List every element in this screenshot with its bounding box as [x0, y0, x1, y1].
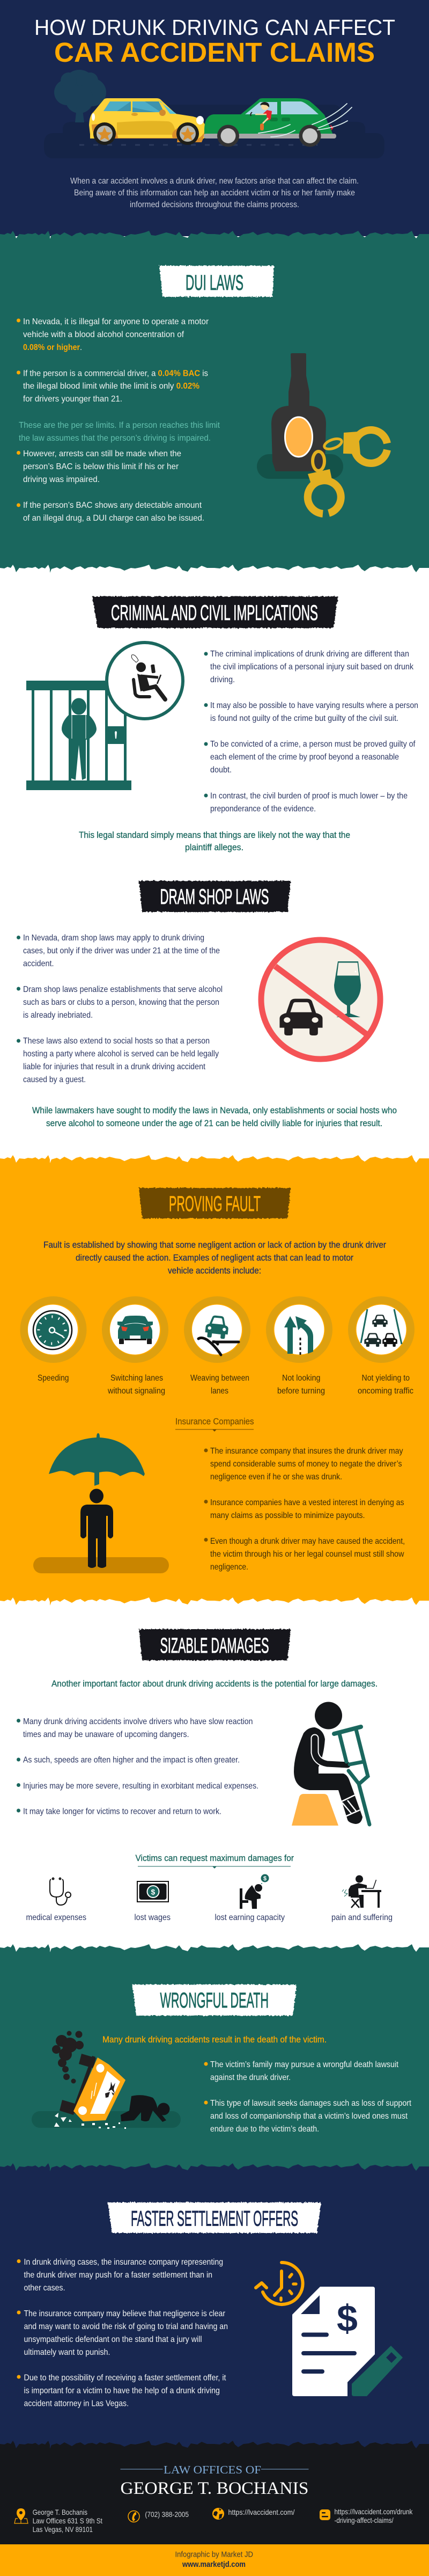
text: DUI bullets: These are the per se limits. If a person reaches this limit [19, 421, 220, 430]
illustration: car crash [44, 70, 384, 158]
panel: footer [0, 2441, 429, 2545]
labels: damages types: pain and suffering [331, 1913, 393, 1922]
heading: proving fault [139, 1188, 291, 1218]
text: settlement bullets: ultimately want to punish. [24, 2348, 110, 2357]
contact: address [14, 2508, 102, 2534]
contact: address: Las Vegas, NV 89101 [33, 2525, 93, 2534]
logo: law offices [120, 2463, 309, 2498]
text: legal standard statement [79, 830, 350, 852]
text: dram shop bullets: such as bars or clubs to a person, knowing that the person [23, 998, 219, 1007]
text: damages bullets: As such, speeds are often higher and the impact is often greater. [23, 1755, 240, 1765]
text: dram shop bullets: cases, but only if the driver was under 21 at the time of the [23, 946, 220, 955]
heading: dram shop laws [139, 881, 291, 912]
drunk driver [250, 102, 272, 130]
icon: jail cell with drunk driver [26, 643, 183, 790]
text: DUI bullets: person’s BAC is below this limit if his or her [23, 462, 179, 471]
text: DUI bullets: for drivers younger than 21. [23, 395, 122, 404]
text: damages bullets: Injuries may be more severe, resulting in exorbitant medical expenses. [23, 1782, 258, 1791]
text: DUI bullets [17, 317, 220, 523]
icon: lost earning capacity [240, 1874, 269, 1909]
contact: blog: https://lvaccident.com/drunk [335, 2507, 413, 2516]
text: wrongful death bullets: against the drunk driver. [210, 2073, 291, 2082]
yellow car [89, 98, 205, 145]
labels: damages types: lost earning capacity [214, 1913, 285, 1922]
text: dram shop bullets: hosting a party where alcohol is served can be held legally [23, 1049, 219, 1059]
labels: negligent acts: Weaving between [190, 1374, 249, 1383]
text: DUI bullets: driving was impaired. [23, 475, 100, 484]
heading: insurance companies [175, 1417, 254, 1432]
text: insurance bullets: The insurance company that insures the drunk driver may [210, 1447, 403, 1456]
labels: negligent acts: Not looking [282, 1374, 321, 1383]
logo: law offices: LAW OFFICES OF [164, 2463, 261, 2476]
text: settlement bullets: In drunk driving cases, the insurance company representing [24, 2258, 223, 2267]
icon: not looking before turning [270, 1300, 329, 1359]
intro text [70, 177, 359, 209]
text: settlement bullets: unsympathetic defendant on the stand that a jury will [24, 2335, 202, 2344]
panel: header [0, 0, 429, 236]
text: legal standard statement: This legal standard simply means that things are likely not the way that the [79, 830, 350, 840]
labels: negligent acts: lanes [211, 1386, 228, 1396]
text: insurance bullets: the victim through his or her legal counsel must still show [210, 1550, 404, 1559]
icon: stethoscope [50, 1878, 71, 1905]
contact: phone [128, 2510, 189, 2522]
text: damages bullets: Many drunk driving accidents involve drivers who have slow reaction [23, 1717, 253, 1726]
icon: no drinking and driving sign [261, 940, 380, 1059]
credit bar: Infographic by Market JD [175, 2550, 253, 2559]
text: insurance bullets: negligence. [210, 1563, 248, 1572]
text: settlement bullets: The insurance company may believe that negligence is clear [24, 2309, 226, 2318]
standing person [80, 1489, 113, 1568]
text: criminal and civil bullets: driving. [210, 675, 235, 684]
icon: not yielding to oncoming traffic [352, 1300, 411, 1359]
title [34, 15, 395, 68]
title: CAR ACCIDENT CLAIMS [54, 37, 375, 68]
icon: switching lanes [106, 1300, 165, 1359]
labels: damages types: lost wages [134, 1913, 171, 1922]
icon: wrecked car and victim [32, 2031, 181, 2129]
labels: negligent acts: Speeding [38, 1374, 69, 1383]
icon: bottle and handcuffs [257, 353, 387, 514]
text: DUI bullets: If the person’s BAC shows any detectable amount [23, 501, 202, 510]
text: wrongful death bullets: endure due to the victim’s death. [210, 2125, 319, 2134]
text: criminal and civil bullets: doubt. [210, 765, 232, 775]
heading: victims can request maximum damages: Victims can request maximum damages for [135, 1853, 294, 1863]
text: fault intro: Fault is established by showing that some negligent action or lack of action by the drunk driver [43, 1240, 386, 1250]
icon: speeding [24, 1300, 83, 1359]
text: DUI bullets: However, arrests can still be made when the [23, 449, 181, 458]
logo: law offices: GEORGE T. BOCHANIS [120, 2479, 309, 2498]
tree [54, 70, 106, 122]
text: wrongful death bullets: and loss of companionship that a victim’s loved ones must [210, 2112, 408, 2121]
text: criminal and civil bullets: each element of the crime by proof beyond a reasonable [210, 753, 399, 762]
text: wrongful death bullets: The victim’s family may pursue a wrongful death lawsuit [210, 2060, 398, 2069]
credit bar: www.marketjd.com [182, 2560, 246, 2569]
panel: faster settlement offers [0, 2163, 429, 2451]
heading: sizable damages [139, 1629, 291, 1660]
text: dram shop bullets [17, 933, 223, 1084]
road background [44, 105, 384, 158]
clock [256, 2263, 303, 2304]
heading: DUI laws: DUI LAWS [186, 271, 243, 295]
credit bar [0, 2544, 429, 2576]
contact: address: George T. Bochanis [33, 2508, 87, 2516]
text: dram shop bullets: These laws also extend to social hosts so that a person [23, 1037, 210, 1046]
smoke [52, 2031, 84, 2084]
text: dram shop bullets: is already inebriated. [23, 1011, 93, 1020]
icon: weaving between lanes [188, 1300, 247, 1359]
text: legal standard statement: plaintiff alleges. [185, 843, 243, 852]
heading: DUI laws [159, 266, 274, 297]
text: wrongful death statement: Many drunk driving accidents result in the death of the victim. [102, 2034, 327, 2045]
heading: victims can request maximum damages [135, 1853, 294, 1869]
jailed person [62, 698, 97, 780]
text: damages bullets [17, 1717, 258, 1816]
heading: criminal and civil implications [92, 596, 338, 628]
contact: phone: (702) 388-2005 [145, 2510, 189, 2519]
icon: lost wages banknote: $ [151, 1887, 156, 1896]
text: wrongful death bullets [204, 2060, 411, 2134]
text: insurance bullets: Insurance companies have a vested interest in denying as [210, 1498, 404, 1507]
text: DUI bullets: the law assumes that the person’s driving is impaired. [19, 434, 211, 443]
text: insurance bullets: Even though a drunk driver may have caused the accident, [210, 1537, 405, 1546]
heading: dram shop laws: DRAM SHOP LAWS [160, 885, 269, 909]
panel: criminal and civil implications, dram shop laws [0, 565, 429, 1164]
text: insurance bullets: many claims as possible to minimize payouts. [210, 1511, 365, 1520]
labels: negligent acts: Switching lanes [110, 1374, 163, 1383]
text: settlement bullets: and may want to avoid the risk of going to trial and having an [24, 2322, 228, 2331]
text: criminal and civil bullets: is found not guilty of the crime but guilty of the civil suit. [210, 714, 398, 723]
text: criminal and civil bullets: In contrast, the civil burden of proof is much lower – by the [210, 791, 408, 801]
contact: address: Law Offices 631 S 9th St [33, 2516, 102, 2525]
text: fault intro [43, 1240, 386, 1275]
text: settlement bullets: is important for a victim to have the help of a drunk driving [24, 2387, 220, 2395]
text: dram shop bullets: In Nevada, dram shop laws may apply to drunk driving [23, 933, 204, 943]
text: settlement bullets: Due to the possibility of receiving a faster settlement offer, it [24, 2374, 226, 2382]
contact: website [212, 2508, 295, 2520]
labels: damages types: medical expenses [26, 1913, 86, 1922]
green car [204, 98, 352, 147]
icon: lost earning capacity: $ [263, 1876, 267, 1882]
contact: website: https://lvaccident.com/ [228, 2508, 295, 2516]
heading: insurance companies: Insurance Companies [175, 1417, 254, 1427]
heading: proving fault: PROVING FAULT [169, 1192, 261, 1216]
text: DUI bullets: vehicle with a blood alcohol concentration of [23, 330, 184, 339]
intro text: Being aware of this information can help an accident victim or his or her family make [74, 188, 355, 198]
panel: sizable damages [0, 1597, 429, 1953]
panel: proving fault [0, 1155, 429, 1606]
text: nevada statement [32, 1106, 397, 1128]
icon: injured person with crutch [292, 1702, 369, 1826]
heading: sizable damages: SIZABLE DAMAGES [160, 1634, 269, 1658]
text: insurance bullets [204, 1447, 405, 1572]
labels: negligent acts: before turning [277, 1386, 325, 1396]
text: settlement bullets: accident attorney in Las Vegas. [24, 2399, 129, 2408]
labels: negligent acts [38, 1374, 413, 1396]
text: nevada statement: While lawmakers have sought to modify the laws in Nevada, only establishments or social hosts who [32, 1106, 397, 1115]
intro text: informed decisions throughout the claims process. [130, 200, 299, 209]
text: dram shop bullets: liable for injuries that result in a drunk driving accident [23, 1062, 205, 1071]
text: fault intro: vehicle accidents include: [168, 1266, 261, 1275]
icon: settlement document, clock and pen [256, 2263, 403, 2396]
text: DUI bullets: of an illegal drug, a DUI charge can also be issued. [23, 514, 204, 523]
icon: driver drinking [131, 655, 165, 699]
labels: damages types [26, 1913, 393, 1922]
heading: wrongful death: WRONGFUL DEATH [160, 1989, 269, 2012]
road dashes [79, 144, 317, 146]
title: HOW DRUNK DRIVING CAN AFFECT [34, 15, 395, 40]
text: fault intro: directly caused the action. Examples of negligent acts that can lead to motor [76, 1253, 353, 1263]
text: settlement bullets: the drunk driver may push for a faster settlement than in [24, 2271, 212, 2280]
text: criminal and civil bullets [204, 650, 418, 814]
text: DUI bullets: the illegal blood limit while the limit is only 0.02% [23, 382, 199, 391]
text: damages bullets: times and may be unaware of upcoming dangers. [23, 1730, 189, 1739]
labels: negligent acts: Not yielding to [361, 1374, 410, 1383]
text: criminal and civil bullets: preponderance of the evidence. [210, 804, 316, 814]
heading: wrongful death [132, 1984, 297, 2016]
text: settlement bullets [17, 2258, 228, 2408]
text: dram shop bullets: accident. [23, 959, 54, 968]
icon: settlement document, clock and pen: $ [337, 2297, 358, 2339]
text: damages bullets: It may take longer for victims to recover and return to work. [23, 1807, 221, 1816]
text: dram shop bullets: Dram shop laws penalize establishments that serve alcohol [23, 985, 223, 994]
text: settlement bullets: other cases. [24, 2283, 65, 2293]
icon: lost wages banknote [137, 1881, 168, 1902]
icon: pain and suffering [342, 1876, 381, 1908]
labels: negligent acts: without signaling [107, 1386, 165, 1396]
contact: blog [320, 2507, 413, 2524]
text: damages statement: Another important factor about drunk driving accidents is the potential for large damages. [51, 1679, 378, 1689]
text: insurance bullets: spend considerable sums of money to negate the driver’s [210, 1460, 402, 1469]
text: DUI bullets: 0.08% or higher. [23, 343, 82, 352]
text: criminal and civil bullets: The criminal implications of drunk driving are different than [210, 650, 409, 659]
contact: blog: -driving-affect-claims/ [335, 2516, 394, 2524]
speed lines [258, 104, 352, 137]
icon: person under umbrella [33, 1433, 169, 1573]
intro text: When a car accident involves a drunk driver, new factors arise that can affect the claim. [70, 177, 359, 186]
panel: DUI laws [0, 231, 429, 573]
text: DUI bullets: In Nevada, it is illegal for anyone to operate a motor [23, 317, 209, 326]
text: DUI bullets: If the person is a commercial driver, a 0.04% BAC is [23, 369, 208, 378]
panel: wrongful death [0, 1944, 429, 2172]
labels: negligent acts: oncoming traffic [358, 1386, 413, 1396]
text: dram shop bullets: caused by a guest. [23, 1075, 86, 1084]
text: nevada statement: serve alcohol to someone under the age of 21 can be held civilly liable for injuries that result. [46, 1119, 382, 1128]
heading: faster settlement offers [108, 2202, 321, 2233]
crouching person [121, 2095, 169, 2122]
text: insurance bullets: negligence even if he or she was drunk. [210, 1472, 342, 1482]
